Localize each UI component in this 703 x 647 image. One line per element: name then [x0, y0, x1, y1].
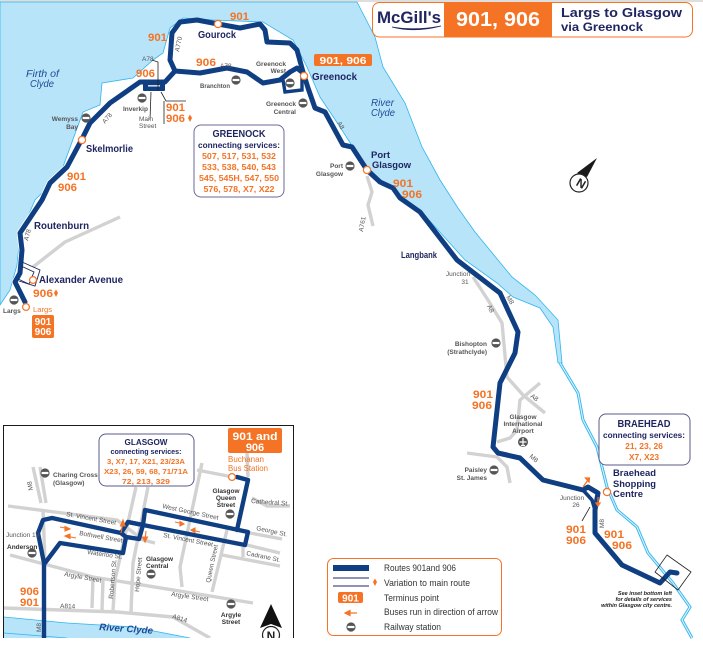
- inset terminus marker: [229, 474, 235, 480]
- icon: north arrow inset: [260, 604, 282, 644]
- small station and road labels: International: [503, 421, 543, 428]
- water labels: Clyde: [30, 79, 54, 90]
- small station and road labels: West: [271, 68, 287, 75]
- route number labels: 901: [230, 11, 249, 23]
- small station and road labels: Bishopton: [455, 341, 487, 348]
- inset street labels: Argyle Street: [171, 591, 209, 603]
- inset street labels: Argyle: [221, 612, 241, 619]
- panel: braehead connecting services: 21, 23, 26: [625, 441, 663, 451]
- icon: north arrow main map: N: [574, 175, 588, 192]
- inset street labels: West George Street: [162, 503, 219, 522]
- small station and road labels: Port: [330, 163, 344, 170]
- header banner: [372, 2, 692, 37]
- inset route labels: Bus Station: [228, 464, 268, 473]
- panel: glasgow connecting services: X23, 26, 59, 68, 71/71A: [104, 467, 189, 476]
- small station and road labels: A78: [142, 56, 154, 63]
- inset terminus box: 906: [246, 442, 264, 454]
- inset river label: River Clyde: [99, 622, 154, 637]
- inset street labels: M8: [26, 480, 35, 491]
- panel: braehead connecting services: connecting services:: [603, 430, 685, 440]
- small station and road labels: Glasgow: [316, 171, 344, 178]
- route number labels: [33, 11, 632, 552]
- route number labels: 906: [472, 400, 492, 412]
- header banner: Largs to Glasgow: [561, 5, 683, 20]
- inset street labels: Central: [146, 563, 169, 570]
- route number labels: 906: [166, 113, 185, 125]
- place names: Glasgow: [372, 160, 412, 171]
- small station and road labels: A78: [220, 63, 232, 70]
- panel: glasgow city centre inset: [0, 426, 300, 647]
- small station and road labels: Junction: [560, 495, 584, 502]
- inset street labels: Argyle Street: [64, 571, 102, 585]
- inset street labels: Waterloo St.: [87, 549, 123, 561]
- water labels: Clyde: [371, 108, 395, 119]
- route number labels: 901: [566, 524, 586, 536]
- panel: glasgow connecting services: 72, 213, 329: [122, 477, 170, 486]
- small station and road labels: Street: [139, 123, 157, 130]
- small station and road labels: 31: [461, 279, 469, 286]
- logo: McGill's: [377, 8, 441, 27]
- small station and road labels: Branchton: [200, 83, 230, 90]
- water labels: River: [371, 98, 395, 109]
- small station and road labels: Bay: [66, 124, 78, 131]
- panel: glasgow connecting services: 3, X7, 17, X21, 23/23A: [107, 457, 186, 466]
- small station and road labels: M8: [504, 294, 515, 306]
- small station and road labels: (Strathclyde): [447, 349, 487, 356]
- small station and road labels: Wemyss: [52, 116, 78, 123]
- place names: Braehead: [613, 468, 656, 479]
- icon: north arrow main map: [570, 158, 597, 192]
- inset street labels: Charing Cross: [53, 472, 98, 479]
- panel: glasgow connecting services: [99, 434, 194, 486]
- inset terminus box: 901 and: [232, 431, 278, 443]
- route number labels: 906: [566, 535, 586, 547]
- place names: Routenburn: [34, 221, 89, 232]
- route number labels: 901: [604, 529, 624, 541]
- route number labels: 906: [58, 182, 77, 194]
- header banner: 901, 906: [456, 9, 540, 31]
- inset street labels: A814: [171, 613, 188, 625]
- panel: legend: Terminus point: [384, 593, 439, 604]
- place names: Alexander Avenue: [39, 275, 123, 286]
- place names: [34, 30, 656, 500]
- small station and road labels: Greenock: [266, 101, 296, 108]
- inset street labels: Glasgow: [146, 556, 174, 563]
- inset street labels: Junction 19: [6, 532, 40, 539]
- inset terminus box: [228, 428, 282, 454]
- inset bottom mask: [0, 638, 300, 647]
- small station and road labels: M8: [599, 519, 606, 528]
- small station and road labels: M8: [528, 453, 539, 465]
- glasgow inset indicator box: [655, 555, 691, 590]
- inset route labels: 901: [20, 597, 39, 609]
- inset note: for details of services: [615, 597, 672, 603]
- greenock terminus box: [314, 54, 372, 67]
- inset street labels: Anderson: [7, 544, 37, 551]
- inset street labels: M8: [36, 623, 43, 632]
- small station and road labels: Airport: [512, 428, 535, 435]
- route number labels: Largs: [33, 305, 52, 314]
- inset street labels: Bothwell Street: [79, 530, 123, 545]
- panel: greenock connecting services: 545, 545H, 547, 550: [199, 173, 279, 183]
- small station and road labels: Paisley: [465, 467, 487, 474]
- inset river: [4, 617, 190, 638]
- largs variation loop: [18, 262, 40, 286]
- route number labels: 906: [33, 288, 53, 300]
- route number labels: 906: [136, 68, 155, 80]
- small station and road labels: [3, 36, 606, 528]
- inset note: [601, 591, 673, 609]
- inset route labels: [20, 455, 268, 609]
- small station and road labels: St. James: [457, 475, 487, 482]
- panel: glasgow connecting services: connecting services:: [110, 447, 182, 456]
- place names: Skelmorlie: [86, 144, 133, 155]
- inset route labels: Buchanan: [228, 455, 264, 464]
- inset bus route: [38, 477, 248, 640]
- small station and road labels: Main: [139, 116, 153, 123]
- header banner: via Greenock: [561, 20, 643, 34]
- small station and road labels: A78: [23, 228, 33, 242]
- small station and road labels: A8: [335, 120, 345, 131]
- route number labels: 901: [393, 178, 413, 190]
- water labels: Firth of: [26, 69, 60, 80]
- inset station icons: [27, 468, 236, 609]
- panel: legend: [328, 558, 502, 636]
- small station and road labels: Central: [274, 109, 296, 116]
- panel: legend: Variation to main route: [384, 578, 470, 589]
- small station and road labels: Greenock: [256, 61, 286, 68]
- braehead direction arrows: [583, 478, 600, 506]
- route number labels: 901: [166, 102, 185, 114]
- small station and road labels: A78: [101, 112, 114, 125]
- small station and road labels: 26: [572, 502, 580, 509]
- small station and road labels: Glasgow: [509, 414, 537, 421]
- variation diamonds: [54, 114, 192, 297]
- place names: Langbank: [401, 250, 438, 261]
- place names: Port: [371, 150, 391, 161]
- panel: greenock connecting services: 576, 578, X7, X22: [204, 184, 275, 194]
- place names: Centre: [613, 489, 643, 500]
- inset street labels: [6, 472, 289, 632]
- panel: legend: Routes 901and 906: [384, 563, 456, 574]
- panel: braehead connecting services: [599, 414, 690, 465]
- inset street labels: Queen: [216, 495, 236, 502]
- roads on main map: [33, 176, 545, 483]
- route number labels: 901: [473, 389, 493, 401]
- small station and road labels: Inverkip: [123, 106, 148, 113]
- icon: airport: [518, 437, 528, 447]
- inverkip variation loop: [143, 83, 165, 91]
- largs terminus box: [32, 315, 54, 338]
- inset route labels: 906: [20, 586, 39, 598]
- inset note: See inset bottom left: [618, 591, 673, 597]
- inset note: within Glasgow city centre.: [601, 603, 672, 609]
- inset street labels: Queen Street: [205, 544, 220, 583]
- route number labels: 901: [148, 32, 167, 44]
- panel: legend: 901: [342, 594, 359, 604]
- route number labels: 906: [402, 189, 422, 201]
- inset street labels: (Glasgow): [53, 480, 84, 487]
- pointer lines: [150, 60, 590, 521]
- inset roads: [4, 453, 290, 638]
- panel: greenock connecting services: GREENOCK: [212, 129, 266, 140]
- inset street labels: St. Vincent Street: [66, 511, 117, 527]
- small station and road labels: Junction: [446, 271, 470, 278]
- route number labels: 901: [67, 171, 86, 183]
- small station and road labels: A770: [174, 36, 184, 52]
- largs terminus box: 901: [35, 317, 52, 328]
- water labels: [26, 69, 395, 119]
- panel: braehead connecting services: X7, X23: [629, 452, 659, 462]
- icon: north arrow inset: N: [267, 629, 275, 643]
- railway station icons: [9, 75, 501, 475]
- greenock terminus box: 901, 906: [320, 56, 367, 67]
- panel: greenock connecting services: connecting services:: [198, 140, 280, 150]
- small station and road labels: A8: [529, 393, 540, 403]
- panel: greenock connecting services: [194, 125, 284, 197]
- place names: Gourock: [198, 30, 236, 41]
- small station and road labels: A8: [485, 304, 495, 314]
- panel: braehead connecting services: BRAEHEAD: [618, 419, 670, 430]
- inset street labels: Street: [217, 502, 236, 509]
- small station and road labels: A761: [358, 216, 368, 232]
- route number labels: 906: [612, 540, 632, 552]
- small station and road labels: Largs: [3, 308, 21, 315]
- largs terminus box: 906: [35, 327, 52, 338]
- inset street labels: St. Vincent Street: [163, 532, 214, 549]
- inset street labels: A814: [60, 603, 76, 611]
- panel: legend: Buses run in direction of arrow: [384, 607, 498, 618]
- inset street labels: Cathedral St.: [251, 498, 289, 508]
- inset street labels: Cadrane St.: [246, 550, 281, 564]
- terminus markers: [23, 20, 611, 496]
- panel: glasgow connecting services: GLASGOW: [124, 437, 168, 447]
- panel: greenock connecting services: 507, 517, 531, 532: [202, 151, 276, 161]
- route number labels: 906: [196, 57, 216, 69]
- panel: legend: Railway station: [384, 622, 441, 633]
- panel: greenock connecting services: 533, 538, 540, 543: [202, 162, 276, 172]
- place names: Greenock: [312, 71, 357, 83]
- inset street labels: Glasgow: [212, 488, 240, 495]
- place names: Shopping: [613, 479, 656, 490]
- inset street labels: Hope Street: [134, 557, 144, 592]
- inset street labels: Street: [222, 619, 241, 626]
- inset street labels: Robertson St.: [108, 559, 118, 599]
- inset street labels: George St.: [256, 525, 288, 539]
- inset direction arrows: [60, 520, 200, 542]
